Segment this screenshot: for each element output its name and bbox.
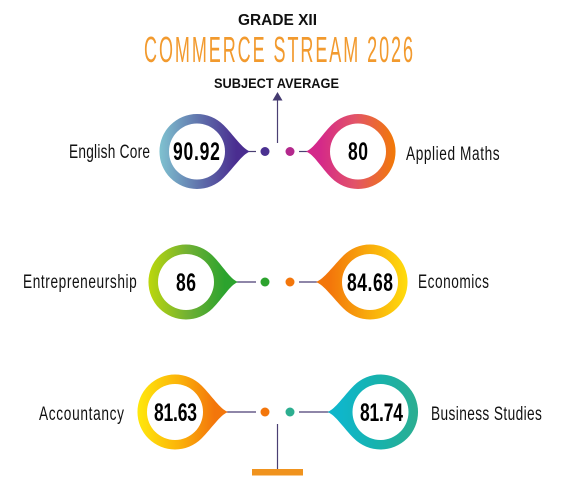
item: Accountancy: 81.63 bbox=[154, 398, 197, 427]
title: COMMERCE STREAM 2026 bbox=[144, 30, 413, 71]
subheading: subject average: SUBJECT AVERAGE bbox=[214, 75, 339, 91]
item: Applied Maths: 80 bbox=[348, 137, 368, 166]
item: Entrepreneurship: 86 bbox=[176, 268, 196, 297]
item: Entrepreneurship: Entrepreneurship bbox=[23, 271, 137, 293]
item: English Core: 90.92 bbox=[173, 137, 220, 166]
item: Applied Maths: Applied Maths bbox=[406, 143, 500, 165]
item: Economics: Economics bbox=[418, 271, 489, 293]
item: Business Studies bbox=[286, 374, 542, 450]
item: English Core bbox=[69, 114, 270, 189]
item: Accountancy: Accountancy bbox=[39, 403, 125, 425]
item: Entrepreneurship bbox=[23, 244, 270, 320]
item: English Core: English Core bbox=[69, 141, 150, 163]
item: Applied Maths bbox=[286, 114, 500, 189]
arrow: up to subject average bbox=[272, 92, 282, 143]
item: Accountancy bbox=[39, 374, 270, 450]
item: Business Studies: Business Studies bbox=[431, 403, 542, 425]
item: Business Studies: 81.74 bbox=[360, 398, 403, 427]
stem and base bar bbox=[252, 424, 303, 476]
heading: grade: GRADE XII bbox=[238, 12, 317, 29]
item: Economics: 84.68 bbox=[347, 268, 393, 297]
item: Economics bbox=[286, 244, 489, 320]
